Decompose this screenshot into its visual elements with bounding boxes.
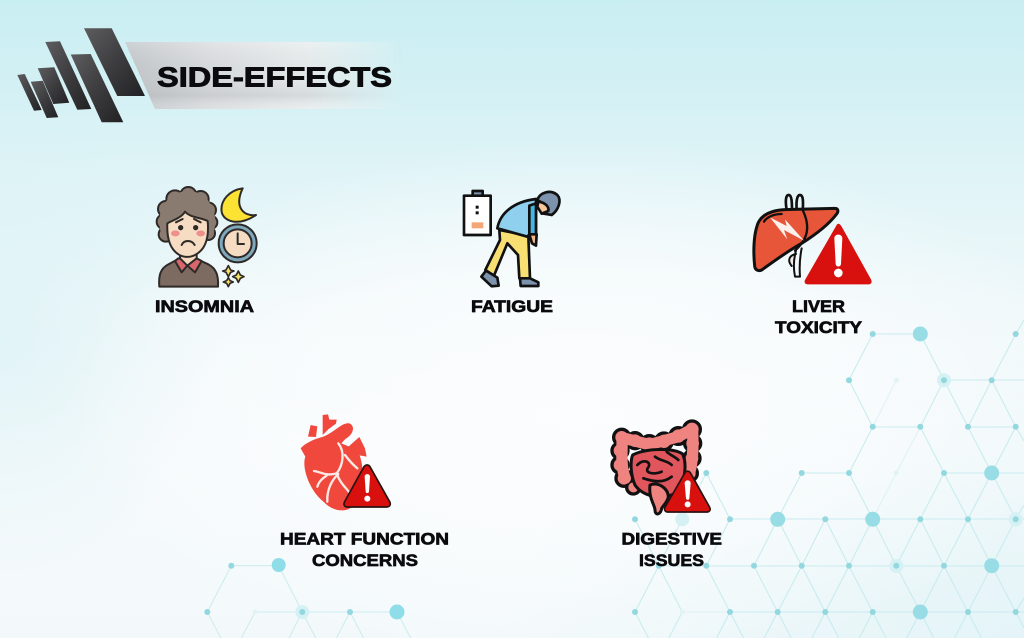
warning triangle bbox=[344, 465, 390, 507]
label: issues: ISSUES bbox=[639, 551, 704, 570]
icon: liver toxicity bbox=[754, 195, 872, 284]
hexagon nodes: lower right bbox=[632, 326, 1023, 620]
icon: insomnia bbox=[157, 187, 257, 287]
icon: heart bbox=[301, 414, 390, 510]
warning triangle bbox=[805, 224, 872, 284]
label: insomnia: INSOMNIA bbox=[155, 297, 254, 316]
label: toxicity: TOXICITY bbox=[775, 318, 863, 337]
logo: slanted bars bbox=[17, 28, 145, 122]
title banner bbox=[125, 42, 412, 109]
icon: fatigue bbox=[464, 191, 559, 286]
icon: digestive bbox=[612, 421, 710, 514]
title: SIDE-EFFECTS bbox=[157, 62, 392, 92]
hexagon network: lower right bbox=[635, 320, 1024, 638]
warning triangle bbox=[665, 471, 710, 512]
label: fatigue: FATIGUE bbox=[471, 297, 553, 316]
label: digestive: DIGESTIVE bbox=[622, 530, 722, 548]
label: liver: LIVER bbox=[792, 297, 845, 316]
hexagon network: lower left bbox=[204, 558, 421, 638]
label: heart function: HEART FUNCTION bbox=[280, 530, 449, 548]
label: concerns: CONCERNS bbox=[312, 551, 418, 570]
